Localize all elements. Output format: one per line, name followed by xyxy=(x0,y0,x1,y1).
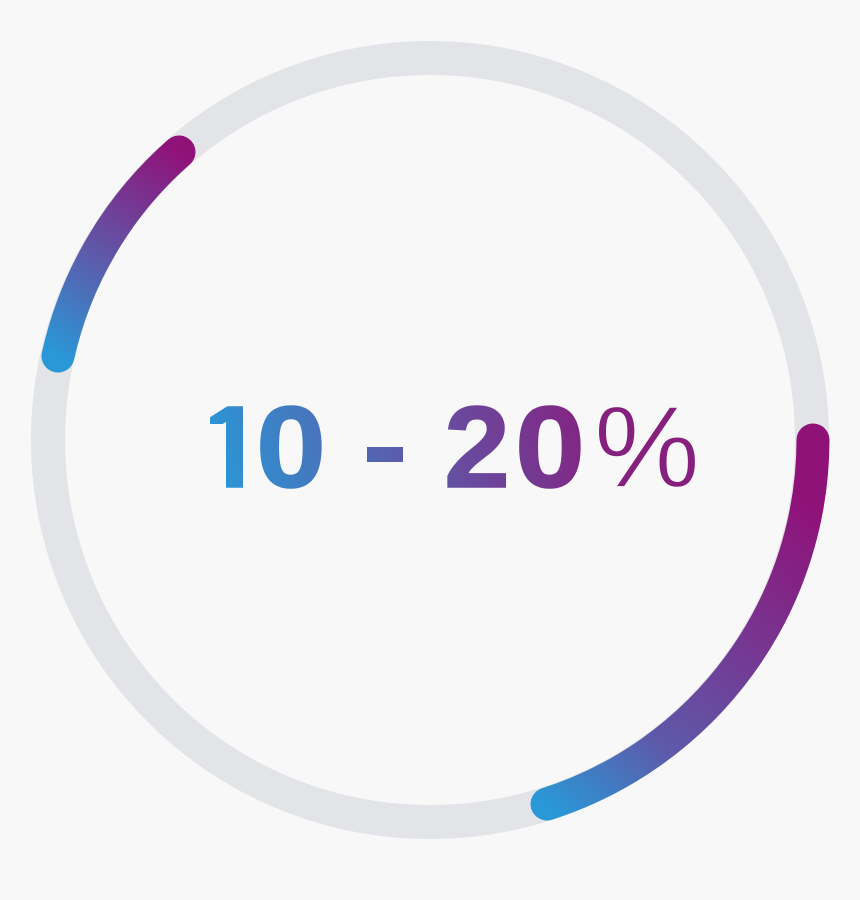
percentage range value: % xyxy=(594,382,700,512)
arc segment: upper left xyxy=(58,152,179,356)
percentage range value: 0 xyxy=(515,382,585,512)
percentage range value: 1 xyxy=(199,382,265,512)
percentage range value xyxy=(210,405,695,489)
percentage range value: 2 xyxy=(444,382,510,512)
ring track xyxy=(48,58,812,822)
percentage range value: 0 xyxy=(256,382,326,512)
arc segment: lower right xyxy=(547,440,813,804)
